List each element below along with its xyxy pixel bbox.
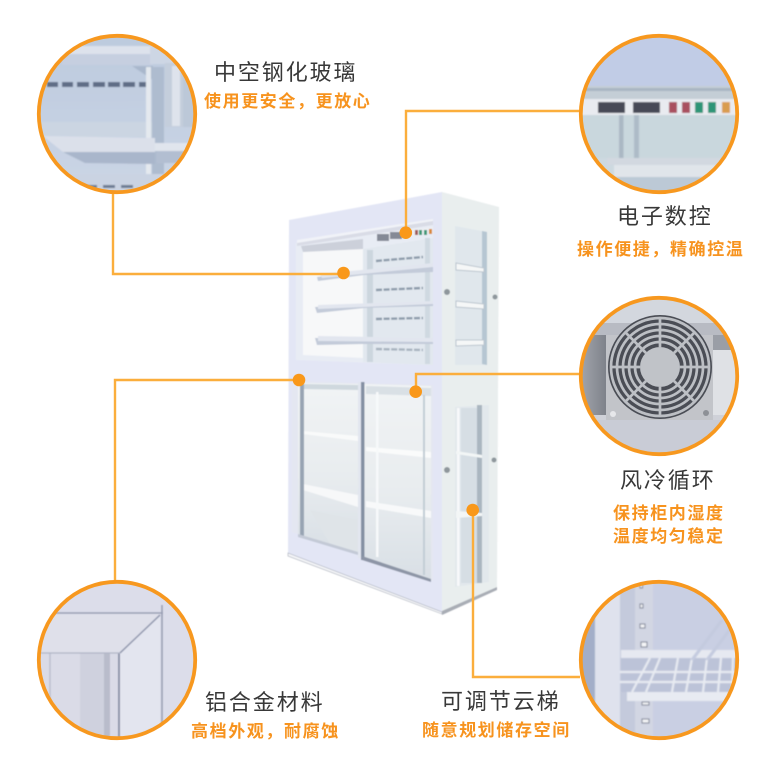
feature label: aluminum alloy: 铝合金材料 [205,690,325,715]
feature label: tempered glass [204,60,371,111]
feature label: air cooling [613,468,725,546]
callout dots [293,226,479,516]
feature label: tempered glass: 使用更安全，更放心 [204,91,371,111]
feature label: electronic control [577,204,744,259]
feature label: air cooling: 温度均匀稳定 [613,526,725,546]
detail circle: adjustable shelf ladder [579,580,739,740]
feature label: adjustable ladder [422,689,571,740]
top rail and control strip [297,219,433,252]
feature label: air cooling: 保持柜内湿度 [613,504,725,523]
feature label: electronic control: 电子数控 [617,204,713,229]
detail circle: tempered glass [37,34,197,196]
feature label: air cooling: 风冷循环 [620,468,716,493]
upper side window [455,226,487,365]
feature label: adjustable ladder: 随意规划储存空间 [422,720,571,740]
upper display opening [296,224,433,365]
cabinet body front [288,192,442,612]
cabinet side panel [442,192,499,612]
feature label: aluminum alloy [191,690,340,741]
feature label: aluminum alloy: 高档外观，耐腐蚀 [191,721,340,741]
detail circle: fan [579,296,739,456]
detail circle: aluminum frame [37,580,197,740]
callout lines [113,111,580,677]
vent slots [376,257,423,350]
base strip [288,553,442,614]
shelves [315,265,433,345]
lower side window [455,405,489,587]
detail circle: electronic control [579,34,739,195]
lower sliding doors [292,381,433,582]
feature label: electronic control: 操作便捷，精确控温 [577,240,744,259]
side knobs [444,289,450,295]
illustration: display cabinet [288,192,499,615]
feature label: adjustable ladder: 可调节云梯 [441,689,561,714]
feature label: tempered glass: 中空钢化玻璃 [214,60,357,85]
